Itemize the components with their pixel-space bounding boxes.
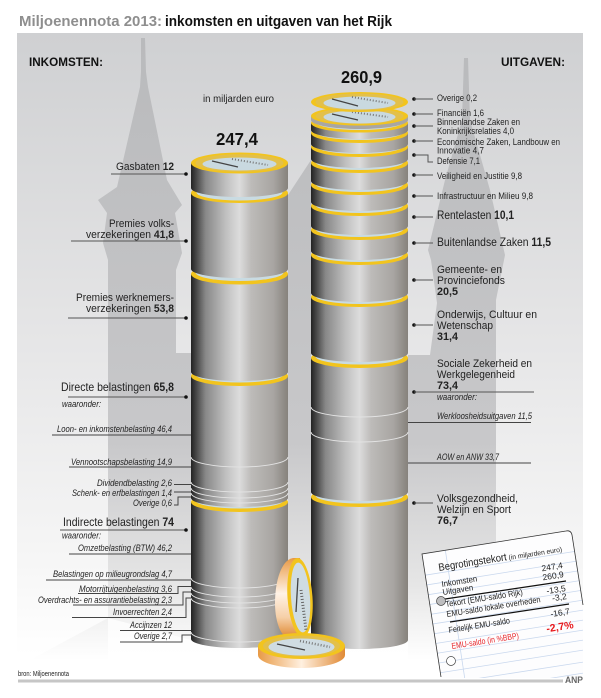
label: financien: Financiën 1,6 (437, 108, 484, 118)
label: sociale zekerheid: waaronder: (437, 392, 477, 402)
label: vennootschapsbelasting: Vennootschapsbelasting 14,9 (71, 457, 172, 467)
label: sociale zekerheid (412, 358, 534, 402)
label: sociale zekerheid: 73,4 (437, 380, 459, 392)
note rows (441, 560, 575, 651)
note rows: 247,4 (541, 560, 564, 573)
label: overdrachtsbelasting: Overdrachts- en assurantiebelasting 2,3 (38, 595, 173, 605)
label: sociale zekerheid: Werkgelegenheid (437, 369, 515, 381)
coin stack: inkomsten (191, 152, 288, 648)
icon: lying coin (258, 633, 345, 668)
label: indirecte belastingen: waaronder: (62, 530, 101, 540)
label: milieugrondslag: Belastingen op milieugrondslag 4,7 (53, 569, 173, 579)
note rows: -16,7 (550, 606, 571, 619)
label: directe belastingen: Directe belastingen 65,8 (61, 380, 174, 394)
note rows: Inkomsten (441, 573, 478, 589)
label: rentelasten: Rentelasten 10,1 (437, 208, 514, 222)
label: volksgezondheid: Volksgezondheid, (437, 493, 518, 505)
label: gemeente- en provinciefonds: Provinciefonds (437, 275, 505, 287)
note rows: Feitelijk EMU-saldo (448, 615, 511, 635)
label: aow en anw: AOW en ANW 33,7 (436, 452, 500, 462)
label: invoerrechten: Invoerrechten 2,4 (113, 607, 172, 617)
logo: ANP: ANP (565, 675, 583, 685)
note heading: Begrotingstekort (438, 551, 508, 574)
label: infrastructuur en milieu: Infrastructuur en Milieu 9,8 (437, 191, 533, 201)
label: dividendbelasting: Dividendbelasting 2,6 (97, 478, 173, 488)
icon: punch holes (436, 596, 456, 666)
heading: uitgaven: UITGAVEN: (501, 55, 565, 69)
icon: standing coin (275, 557, 315, 638)
label: directe belastingen (61, 380, 188, 409)
note rows: EMU-saldo (in %BBP) (451, 630, 520, 651)
note rows: -13,5 (546, 583, 567, 596)
label: binnenlandse zaken: Binnenlandse Zaken en (437, 117, 520, 127)
label: gemeente- en provinciefonds (412, 264, 505, 298)
silhouette: right tower (408, 58, 505, 660)
panel: begrotingstekort note (422, 530, 584, 678)
label: financien (412, 108, 484, 118)
label: premies volksverzekeringen (71, 218, 188, 243)
label: defensie: Defensie 7,1 (437, 156, 480, 166)
title: inkomsten en uitgaven van het Rijk (165, 14, 393, 30)
label: onderwijs: Wetenschap (437, 320, 493, 332)
label: aow en anw (408, 452, 531, 463)
label: overige 2,7: Overige 2,7 (134, 631, 173, 641)
label: schenk- en erfbelastingen: Schenk- en erfbelastingen 1,4 (72, 488, 172, 498)
label: binnenlandse zaken (412, 117, 520, 136)
footer bar (18, 680, 563, 682)
total uitgaven: 260,9 (341, 67, 382, 87)
title (19, 14, 393, 30)
label: volksgezondheid: 76,7 (437, 515, 458, 527)
label: premies volksverzekeringen: verzekeringen 41,8 (86, 229, 174, 241)
label: accijnzen: Accijnzen 12 (129, 620, 172, 630)
label: premies werknemersverzekeringen: verzekeringen 53,8 (86, 303, 174, 315)
label: indirecte belastingen (60, 515, 188, 540)
label: overige 2,7 (120, 631, 191, 642)
label: sociale zekerheid: Sociale Zekerheid en (437, 358, 532, 370)
label: economische zaken: Economische Zaken, Landbouw en (437, 137, 560, 147)
icon: second coin (311, 106, 408, 126)
label: accijnzen (120, 620, 191, 630)
note rows: Uitgaven (442, 582, 474, 597)
label: omzetbelasting: Omzetbelasting (BTW) 46,2 (78, 543, 172, 553)
label: werkloosheidsuitgaven: Werkloosheidsuitgaven 11,5 (437, 411, 533, 421)
label: economische zaken: Innovatie 4,7 (437, 146, 484, 156)
label: invoerrechten (72, 598, 191, 618)
note heading: (in miljarden euro) (508, 547, 563, 562)
label: veiligheid en justitie: Veiligheid en Justitie 9,8 (437, 171, 522, 181)
title: Miljoenennota 2013: (19, 14, 162, 30)
label: buitenlandse zaken: Buitenlandse Zaken 11,5 (437, 235, 551, 249)
label: economische zaken (412, 137, 560, 156)
label: volksgezondheid (412, 493, 518, 527)
label: onderwijs (412, 309, 537, 343)
unit note: in miljarden euro (203, 94, 274, 105)
note rows: 260,9 (542, 569, 565, 582)
label: indirecte belastingen: Indirecte belastingen 74 (63, 515, 174, 529)
label: overige 0,6: Overige 0,6 (133, 498, 173, 508)
label: gemeente- en provinciefonds: 20,5 (437, 286, 458, 298)
note rows: -3,2 (551, 591, 568, 603)
label: gemeente- en provinciefonds: Gemeente- en (437, 264, 502, 276)
label: motorrijtuigenbelasting: Motorrijtuigenbelasting 3,6 (79, 584, 173, 594)
label: directe belastingen: waaronder: (62, 399, 101, 409)
icon: floating top coin (311, 92, 408, 112)
heading: inkomsten: INKOMSTEN: (29, 55, 103, 69)
label: onderwijs: 31,4 (437, 331, 459, 343)
note rows: EMU-saldo lokale overheden (446, 594, 541, 619)
icon: top coin face (191, 152, 288, 174)
silhouette: middle building (288, 160, 311, 650)
silhouette: left tower (30, 38, 191, 660)
label: onderwijs: Onderwijs, Cultuur en (437, 309, 537, 321)
note rows: Tekort (EMU-saldo Rijk) (445, 587, 523, 609)
label: volksgezondheid: Welzijn en Sport (437, 504, 511, 516)
note rows: -2,7% (545, 619, 575, 635)
label: premies werknemersverzekeringen: Premies werknemers- (76, 292, 174, 304)
label: overige 0,2: Overige 0,2 (437, 93, 477, 103)
label: overige 0,2 (412, 93, 477, 103)
total inkomsten: 247,4 (216, 129, 258, 149)
label: premies werknemersverzekeringen (68, 292, 188, 320)
footer source: bron: Miljoenennota (18, 671, 69, 678)
label: loon- en inkomstenbelasting: Loon- en inkomstenbelasting 46,4 (57, 424, 172, 434)
coin stack: uitgaven (311, 92, 408, 649)
label: defensie (412, 153, 480, 166)
label: premies volksverzekeringen: Premies volks- (109, 218, 174, 230)
note heading (438, 547, 563, 574)
label: werkloosheidsuitgaven (408, 411, 533, 422)
label: binnenlandse zaken: Koninkrijksrelaties 4,0 (437, 126, 514, 136)
label: gasbaten: Gasbaten 12 (116, 161, 174, 173)
label: gasbaten (111, 161, 188, 176)
